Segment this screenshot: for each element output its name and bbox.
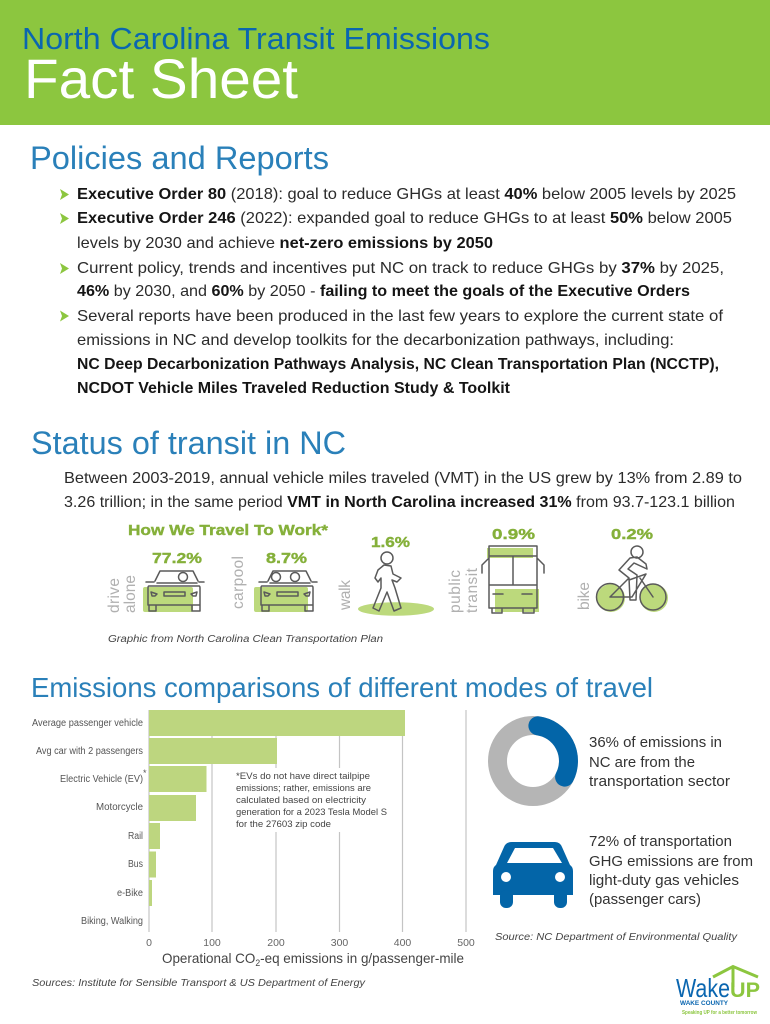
text block: 72 percent: GHG emissions are from (589, 854, 753, 870)
stat: drive alone: drive (106, 578, 123, 613)
title: North Carolina Transit Emissions (22, 21, 490, 56)
bullet text: several reports: NCDOT Vehicle Miles Traveled Reduction Study & Toolkit (77, 380, 511, 397)
stat: carpool: carpool (230, 556, 247, 609)
bullet text: executive order 246 (77, 210, 732, 252)
bullet text: current policy: Current policy, trends and incentives put NC on track to reduce GHGs by 37% by 2025, (77, 260, 724, 277)
stat: public transit (447, 526, 544, 613)
stat: public transit: transit (464, 567, 481, 613)
bullet text: several reports: NC Deep Decarbonization Pathways Analysis, NC Clean Transportation Plan (NCCTP), (77, 356, 719, 373)
caption: Graphic from North Carolina Clean Transportation Plan (108, 634, 383, 645)
category labels: Biking, Walking (81, 916, 143, 927)
bullet text: several reports: emissions in NC and develop toolkits for the decarbonization pathways, including: (77, 332, 674, 349)
stat: bike (576, 526, 668, 612)
header banner (0, 0, 770, 125)
chart note: generation for a 2023 Tesla Model S (236, 807, 387, 818)
category labels: Motorcycle (96, 802, 143, 813)
stat: carpool: 8.7% (266, 550, 307, 567)
logo: WakeUP Wake County: Wake (676, 973, 730, 1003)
text block: 36 percent: NC are from the (589, 755, 695, 771)
category labels: Average passenger vehicle (32, 718, 143, 729)
bars (149, 710, 405, 906)
logo: WakeUP Wake County: WAKE COUNTY (680, 1001, 728, 1007)
axis ticks: 100 (203, 937, 221, 949)
bullet text: several reports: Several reports have been produced in the last few years to explore the current state of (77, 308, 724, 325)
graphic title: How We Travel To Work* (128, 522, 328, 539)
stat: bike: 0.2% (611, 526, 653, 543)
stat: bike: bike (576, 582, 593, 610)
bullet text: current policy: 46% by 2030, and 60% by 2050 - failing to meet the goals of the Executive Orders (77, 283, 690, 300)
graphic: how we travel to work (106, 522, 668, 645)
logo: WakeUP Wake County (676, 966, 760, 1016)
category labels: Bus (128, 859, 143, 870)
axis title: 2 (255, 958, 260, 968)
chart: donut 36 percent (498, 726, 568, 796)
heading: policies and reports: Policies and Reports (30, 140, 329, 176)
axis ticks (146, 937, 475, 949)
stat: walk: 1.6% (371, 534, 410, 551)
bullet text: several reports (77, 308, 724, 397)
stat: drive alone: alone (122, 575, 139, 613)
stat: drive alone: 77.2% (152, 550, 202, 567)
heading: status of transit: Status of transit in NC (31, 425, 346, 461)
subtitle: Fact Sheet (24, 47, 298, 110)
bullet text: executive order 246: levels by 2030 and achieve net-zero emissions by 2050 (77, 235, 493, 252)
text block: 72 percent: 72% of transportation (589, 834, 732, 850)
axis ticks: 200 (267, 937, 285, 949)
heading: emissions comparisons: Emissions comparisons of different modes of travel (31, 672, 653, 703)
stat: public transit: 0.9% (492, 526, 535, 543)
chart note: calculated based on electricity (236, 795, 366, 806)
axis ticks: 400 (394, 937, 411, 949)
source: NC DEQ: Source: NC Department of Environmental Quality (495, 932, 738, 943)
text block: 36 percent (589, 735, 730, 790)
category labels (32, 718, 147, 927)
category labels: Electric Vehicle (EV) (60, 774, 143, 785)
chart source: Sources: Institute for Sensible Transport & US Department of Energy (32, 978, 366, 989)
chart note: *EVs do not have direct tailpipe (236, 771, 370, 782)
logo: WakeUP Wake County: Speaking UP for a better tomorrow (682, 1010, 758, 1016)
panel: policies bullet list (60, 186, 736, 397)
stat: walk: walk (337, 580, 354, 611)
stat: drive alone (106, 550, 204, 613)
stat: carpool (230, 550, 317, 612)
text block: VMT growth: Between 2003-2019, annual vehicle miles traveled (VMT) in the US grew by 13% from 2.89 to (64, 470, 742, 487)
category labels: Rail (128, 831, 143, 842)
text block: 72 percent (589, 834, 753, 908)
stat: walk (337, 534, 434, 616)
axis title: -eq emissions in g/passenger-mile (260, 950, 464, 966)
bar chart: emissions by mode (32, 710, 475, 968)
stat: public transit: public (447, 570, 464, 613)
text block: VMT growth (64, 470, 742, 511)
icon: bullet arrows (60, 189, 69, 322)
chart note: for the 27603 zip code (236, 819, 331, 830)
logo: WakeUP Wake County: UP (730, 979, 760, 1002)
icon: blue car (493, 842, 573, 908)
text block: VMT growth: 3.26 trillion; in the same period VMT in North Carolina increased 31% from 93.7-123.1 billion (64, 494, 735, 511)
text block: 36 percent: 36% of emissions in (589, 735, 722, 751)
bullet text: current policy (77, 260, 724, 300)
category labels: Avg car with 2 passengers (36, 746, 143, 757)
text block: 72 percent: (passenger cars) (589, 892, 701, 908)
bullet text: executive order 246: Executive Order 246 (2022): expanded goal to reduce GHGs to at least 50% below 2005 (77, 210, 732, 227)
axis title: Operational CO (162, 950, 259, 966)
chart note (230, 768, 394, 832)
axis ticks: 500 (457, 937, 475, 949)
axis ticks: 0 (146, 937, 152, 949)
axis ticks: 300 (331, 937, 348, 949)
text block: 36 percent: transportation sector (589, 774, 730, 790)
chart note: emissions; rather, emissions are (236, 783, 371, 794)
category labels: e-Bike (117, 888, 143, 899)
bullet text: executive order 80: Executive Order 80 (2018): goal to reduce GHGs at least 40% below 2005 levels by 2025 (77, 186, 736, 203)
category labels: * (143, 768, 147, 778)
text block: 72 percent: light-duty gas vehicles (589, 873, 739, 889)
